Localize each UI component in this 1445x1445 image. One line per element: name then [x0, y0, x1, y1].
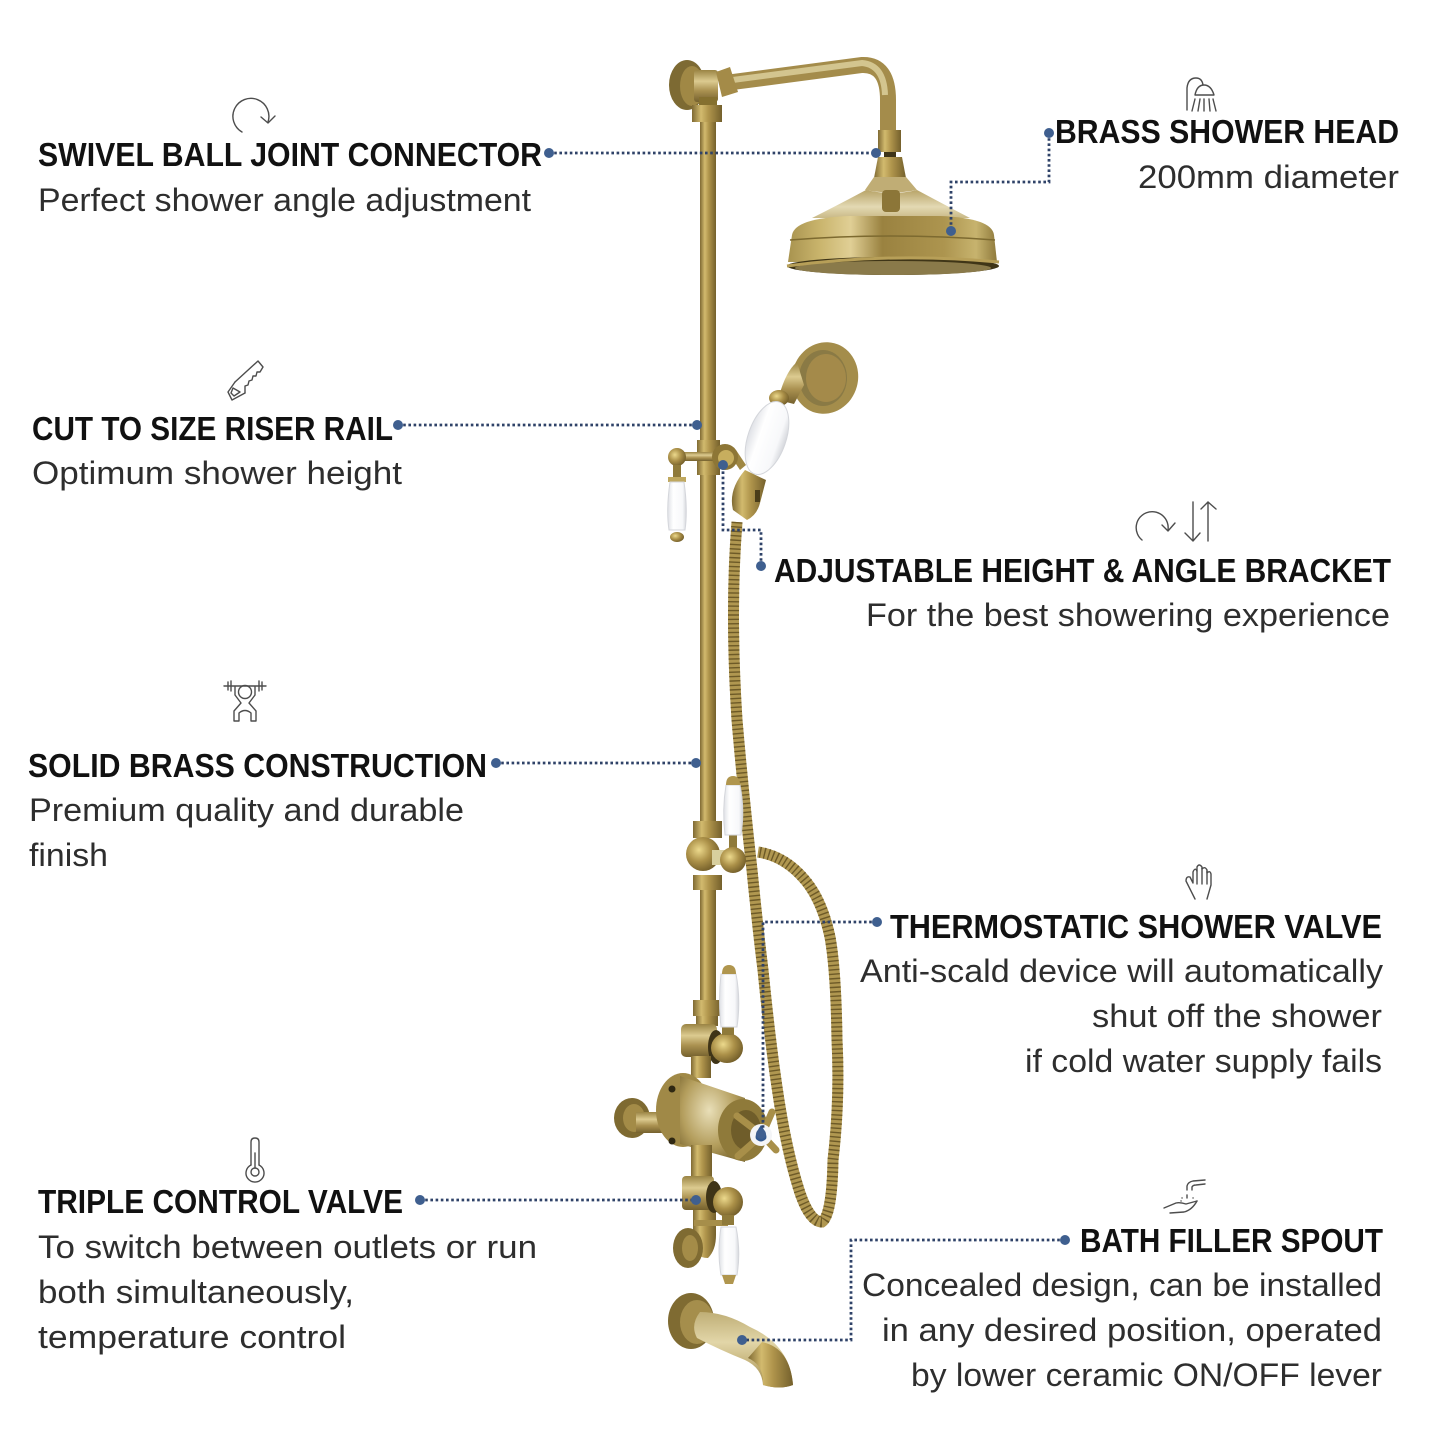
- heading: TRIPLE CONTROL VALVE: [38, 1183, 403, 1220]
- upper diverter valve: [686, 776, 746, 890]
- callout: solid brass construction: [28, 681, 701, 873]
- description: [29, 792, 464, 873]
- heading: BRASS SHOWER HEAD: [1055, 113, 1399, 150]
- leader line: [393, 420, 702, 430]
- description: 200mm diameter: [1138, 159, 1399, 195]
- callout: swivel ball joint connector: [38, 98, 881, 218]
- callout: cut to size riser rail: [32, 361, 702, 491]
- description: [38, 1229, 537, 1355]
- flexible hose: [734, 522, 838, 1222]
- description: [862, 1267, 1382, 1393]
- callout: thermostatic shower valve: [756, 865, 1383, 1139]
- icon: hand: [1186, 865, 1211, 899]
- description: Perfect shower angle adjustment: [38, 182, 531, 218]
- callout: triple control valve: [38, 1138, 701, 1355]
- lever handle on slider bracket: [668, 440, 738, 542]
- thermostatic valve body: [614, 1073, 776, 1162]
- description: temperature control: [38, 1319, 346, 1355]
- riser rail: [700, 120, 716, 1003]
- heading: SOLID BRASS CONSTRUCTION: [28, 747, 487, 784]
- thermostatic lever and lower riser fitting: [681, 965, 743, 1078]
- leader line: [718, 460, 766, 571]
- heading: THERMOSTATIC SHOWER VALVE: [890, 908, 1382, 945]
- icon: weightlifter: [224, 681, 266, 721]
- triple control valve and lower lever: [673, 1145, 743, 1284]
- heading: BATH FILLER SPOUT: [1080, 1222, 1383, 1259]
- description: [860, 953, 1383, 1079]
- description: For the best showering experience: [866, 597, 1390, 633]
- heading: SWIVEL BALL JOINT CONNECTOR: [38, 136, 542, 173]
- leader line: [756, 917, 882, 1139]
- icon: thermometer: [246, 1138, 264, 1182]
- description: both simultaneously,: [38, 1274, 354, 1310]
- callout: adjustable height and angle bracket: [718, 460, 1391, 633]
- icon: tap and hand: [1164, 1180, 1205, 1213]
- description: finish: [29, 837, 108, 873]
- hand shower: [730, 335, 866, 520]
- icon: rotation arrow: [233, 98, 275, 132]
- callout: bath filler spout: [737, 1180, 1383, 1393]
- description: To switch between outlets or run: [38, 1229, 537, 1265]
- description: Premium quality and durable: [29, 792, 464, 828]
- description: Concealed design, can be installed: [862, 1267, 1382, 1303]
- description: by lower ceramic ON/OFF lever: [911, 1357, 1382, 1393]
- wall bracket and arm: [669, 60, 888, 132]
- bath filler spout: [668, 1293, 793, 1388]
- shower head: [787, 130, 999, 275]
- icon: saw: [228, 361, 263, 400]
- description: in any desired position, operated: [882, 1312, 1382, 1348]
- icon: rotate and height arrows: [1136, 502, 1216, 541]
- description: shut off the shower: [1092, 998, 1382, 1034]
- leader line: [491, 758, 701, 768]
- heading: CUT TO SIZE RISER RAIL: [32, 410, 393, 447]
- callout: brass shower head: [946, 78, 1399, 236]
- shower system product illustration: [614, 60, 999, 1388]
- leader line: [737, 1235, 1070, 1345]
- description: Optimum shower height: [32, 455, 402, 491]
- leader line: [544, 148, 881, 158]
- leader line: [415, 1195, 701, 1205]
- description: if cold water supply fails: [1025, 1043, 1382, 1079]
- leader line: [946, 128, 1054, 236]
- icon: shower: [1187, 78, 1216, 111]
- heading: ADJUSTABLE HEIGHT & ANGLE BRACKET: [774, 552, 1391, 589]
- description: Anti-scald device will automatically: [860, 953, 1383, 989]
